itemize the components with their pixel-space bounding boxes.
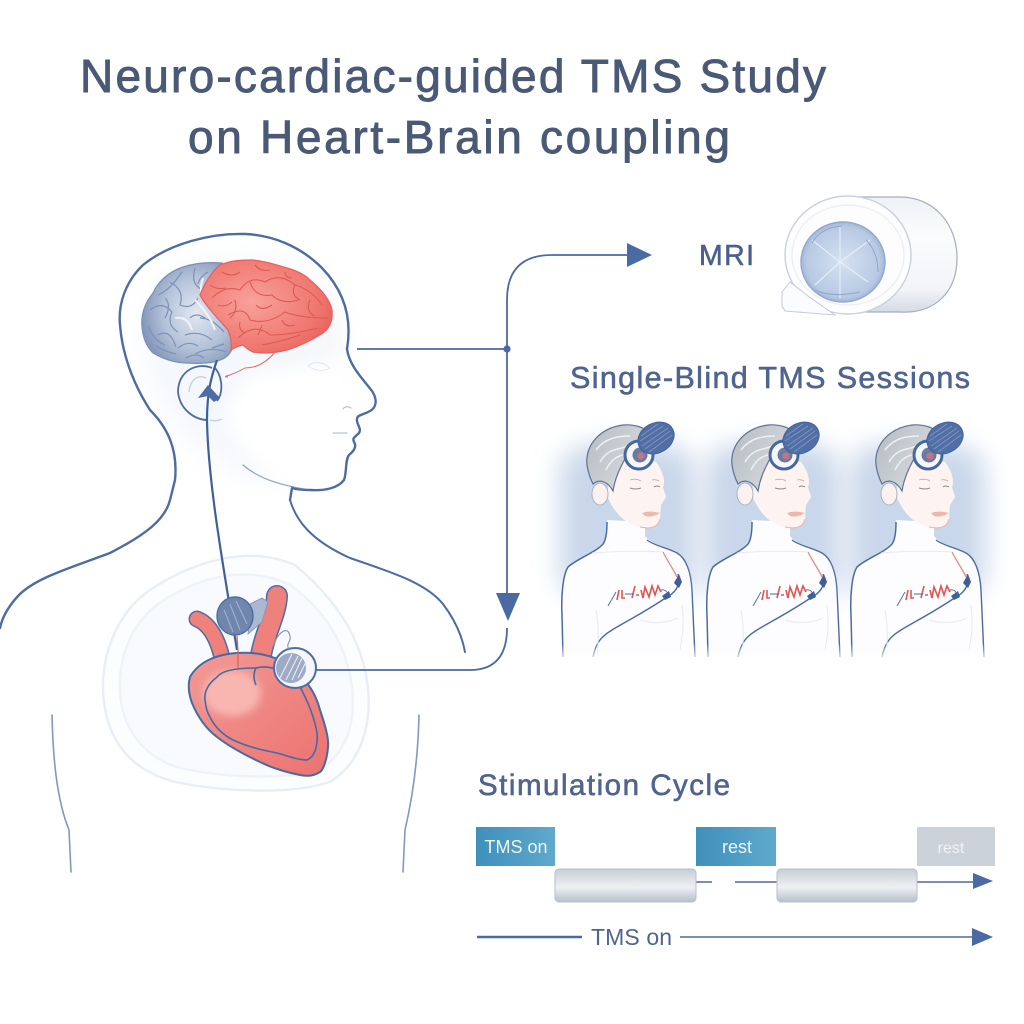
block: TMS on xyxy=(476,827,555,866)
panel: TMS session 3 xyxy=(845,416,990,663)
block: rest: rest xyxy=(722,837,752,857)
heart xyxy=(189,596,328,776)
chest outline xyxy=(103,556,369,791)
heart inner contour xyxy=(205,667,317,760)
connector arrows xyxy=(315,243,652,670)
block: grey gap 2 xyxy=(777,869,917,902)
block: rest xyxy=(696,827,776,866)
heart highlight xyxy=(203,670,261,716)
sessions heading: Single-Blind TMS Sessions xyxy=(570,361,970,395)
small vessel loop xyxy=(273,631,290,650)
title: on Heart-Brain coupling xyxy=(188,111,730,163)
nerve ganglion xyxy=(198,385,220,402)
title: Neuro-cardiac-guided TMS Study xyxy=(80,50,826,102)
block: faded rest: rest xyxy=(938,840,965,857)
panel: TMS session 1 xyxy=(556,416,701,663)
panel: TMS session 2 xyxy=(701,416,846,663)
stimulation cycle diagram xyxy=(476,827,995,902)
lower sphere xyxy=(274,648,316,688)
left vessel xyxy=(197,619,222,658)
block: grey gap 1 xyxy=(555,869,696,902)
MRI label: MRI xyxy=(699,240,754,272)
arrow to MRI xyxy=(507,243,652,349)
head and body outline xyxy=(0,234,465,872)
brain: left blue hemisphere xyxy=(142,263,232,363)
ear xyxy=(178,366,222,421)
title xyxy=(80,50,826,163)
line from heart xyxy=(315,628,507,670)
block: TMS on: TMS on xyxy=(484,837,548,857)
nerve line: brain to heart xyxy=(207,360,237,650)
cycle heading: Stimulation Cycle xyxy=(478,769,730,802)
figure: human body with brain and heart xyxy=(0,234,465,872)
heart body xyxy=(189,653,328,776)
track line xyxy=(696,873,993,889)
brain: right red hemisphere xyxy=(200,260,332,377)
block: faded rest xyxy=(917,827,995,866)
arrow down xyxy=(496,349,520,621)
junction dot xyxy=(503,345,511,353)
upper sphere xyxy=(217,597,268,668)
TMS on timeline arrow: TMS on xyxy=(591,924,672,950)
right vessel xyxy=(261,596,277,655)
line from head to junction xyxy=(357,348,507,350)
TMS on timeline arrow xyxy=(477,924,993,950)
icon: MRI scanner xyxy=(782,196,957,315)
